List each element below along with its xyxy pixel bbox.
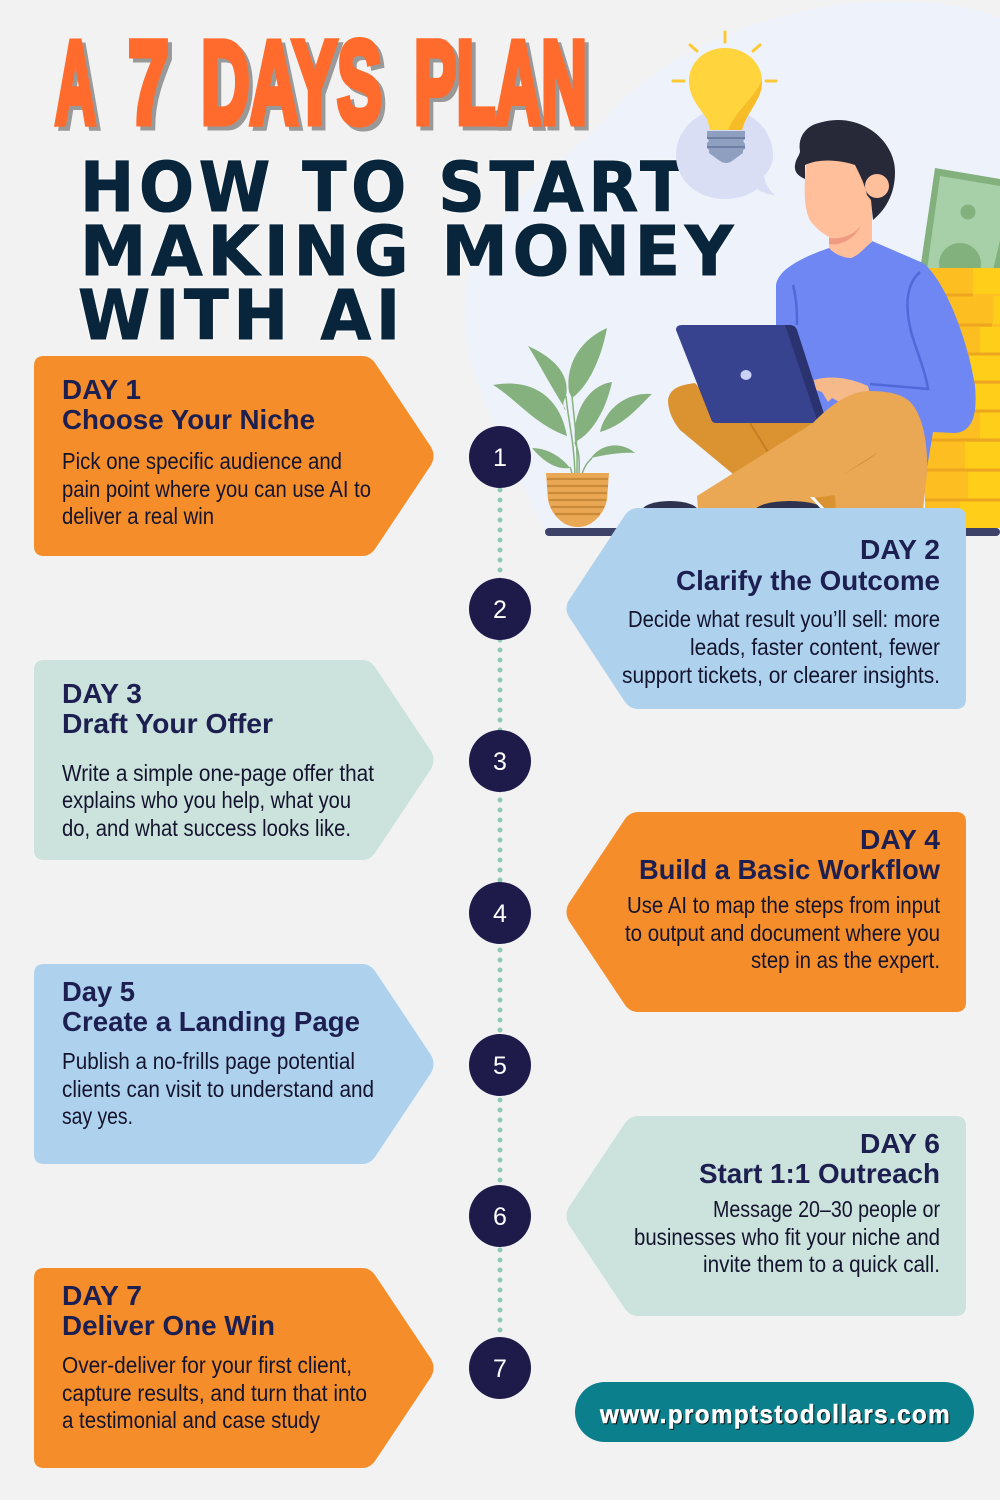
icon: stack of gold coins [925, 268, 1000, 528]
timeline step 2: 2 [493, 596, 507, 624]
panel: day 5: Create a Landing Page [62, 1006, 360, 1037]
timeline step 4 [469, 882, 531, 944]
panel: day 5: Day 5 [62, 976, 135, 1007]
panel: day 1: deliver a real win [62, 503, 214, 529]
website url pill [575, 1382, 974, 1442]
timeline step 5 [469, 1034, 531, 1096]
panel: day 4: to output and document where you [625, 920, 940, 946]
panel: day 6: invite them to a quick call. [703, 1251, 940, 1277]
panel: day 7 [34, 1268, 434, 1468]
illustration background blob [465, 2, 1000, 530]
timeline step 6: 6 [493, 1203, 507, 1231]
panel: day 2: support tickets, or clearer insights. [622, 662, 940, 688]
panel: day 1 [34, 356, 434, 556]
timeline step 3: 3 [493, 748, 507, 776]
headline: how to start making money with ai: WITH AI [78, 276, 405, 356]
panel: day 1: pain point where you can use AI to [62, 476, 371, 502]
timeline dotted connector [498, 460, 502, 1368]
timeline step 1 [469, 426, 531, 488]
panel: day 1: Choose Your Niche [62, 404, 315, 435]
panel: day 2 [566, 508, 966, 709]
panel: day 5: say yes. [62, 1103, 133, 1129]
panel: day 6: DAY 6 [860, 1128, 940, 1159]
timeline step 7 [469, 1337, 531, 1399]
panel: day 2: Decide what result you’ll sell: more [628, 606, 940, 632]
panel: day 2: DAY 2 [860, 534, 940, 565]
panel: day 4 [566, 812, 966, 1012]
panel: day 3: Write a simple one-page offer that [62, 760, 375, 786]
panel: day 3 [34, 660, 434, 860]
panel: day 3: DAY 3 [62, 678, 142, 709]
panel: day 7: Over-deliver for your first client, [62, 1352, 352, 1378]
title: a 7 days plan: 7 [128, 17, 169, 149]
panel: day 1: Pick one specific audience and [62, 448, 342, 474]
headline: how to start making money with ai: HOW TO START [80, 148, 689, 228]
panel: day 3: explains who you help, what you [62, 787, 351, 813]
panel: day 7: Deliver One Win [62, 1310, 275, 1341]
panel: day 2: Clarify the Outcome [676, 565, 940, 596]
icon: cash bill [920, 168, 1000, 285]
panel: day 4: DAY 4 [860, 824, 940, 855]
panel: day 2: leads, faster content, fewer [690, 634, 940, 660]
title: a 7 days plan [55, 17, 587, 149]
panel: day 6: businesses who fit your niche and [634, 1224, 940, 1250]
timeline step 1: 1 [493, 444, 507, 472]
icon: light bulb in speech bubble [673, 32, 776, 199]
icon: shelf line [545, 528, 1000, 536]
panel: day 5 [34, 964, 434, 1164]
panel: day 6: Start 1:1 Outreach [699, 1158, 940, 1189]
timeline step 5: 5 [493, 1052, 507, 1080]
panel: day 7: DAY 7 [62, 1280, 142, 1311]
timeline step 2 [469, 578, 531, 640]
title: a 7 days plan: A [55, 17, 96, 149]
panel: day 7: capture results, and turn that into [62, 1380, 367, 1406]
panel: day 7: a testimonial and case study [62, 1407, 320, 1433]
panel: day 4: step in as the expert. [751, 947, 940, 973]
panel: day 6: Message 20–30 people or [713, 1196, 940, 1222]
headline: how to start making money with ai [78, 148, 738, 356]
timeline step 3 [469, 730, 531, 792]
headline: how to start making money with ai: MAKING MONEY [80, 212, 738, 292]
panel: day 1: DAY 1 [62, 374, 141, 405]
timeline step 7: 7 [493, 1355, 507, 1383]
timeline step 6 [469, 1185, 531, 1247]
title: a 7 days plan: DAYS [201, 17, 382, 149]
panel: day 3: Draft Your Offer [62, 708, 273, 739]
illustration: man with laptop [642, 120, 976, 521]
icon: potted plant [493, 328, 652, 527]
panel: day 4: Build a Basic Workflow [639, 854, 940, 885]
timeline step 4: 4 [493, 900, 507, 928]
panel: day 3: do, and what success looks like. [62, 815, 351, 841]
title: a 7 days plan: PLAN [414, 17, 587, 149]
panel: day 5: clients can visit to understand and [62, 1076, 374, 1102]
panel: day 4: Use AI to map the steps from input [627, 892, 941, 918]
website url pill: www.promptstodollars.com [599, 1399, 951, 1429]
panel: day 6 [566, 1116, 966, 1316]
panel: day 5: Publish a no-frills page potential [62, 1048, 355, 1074]
